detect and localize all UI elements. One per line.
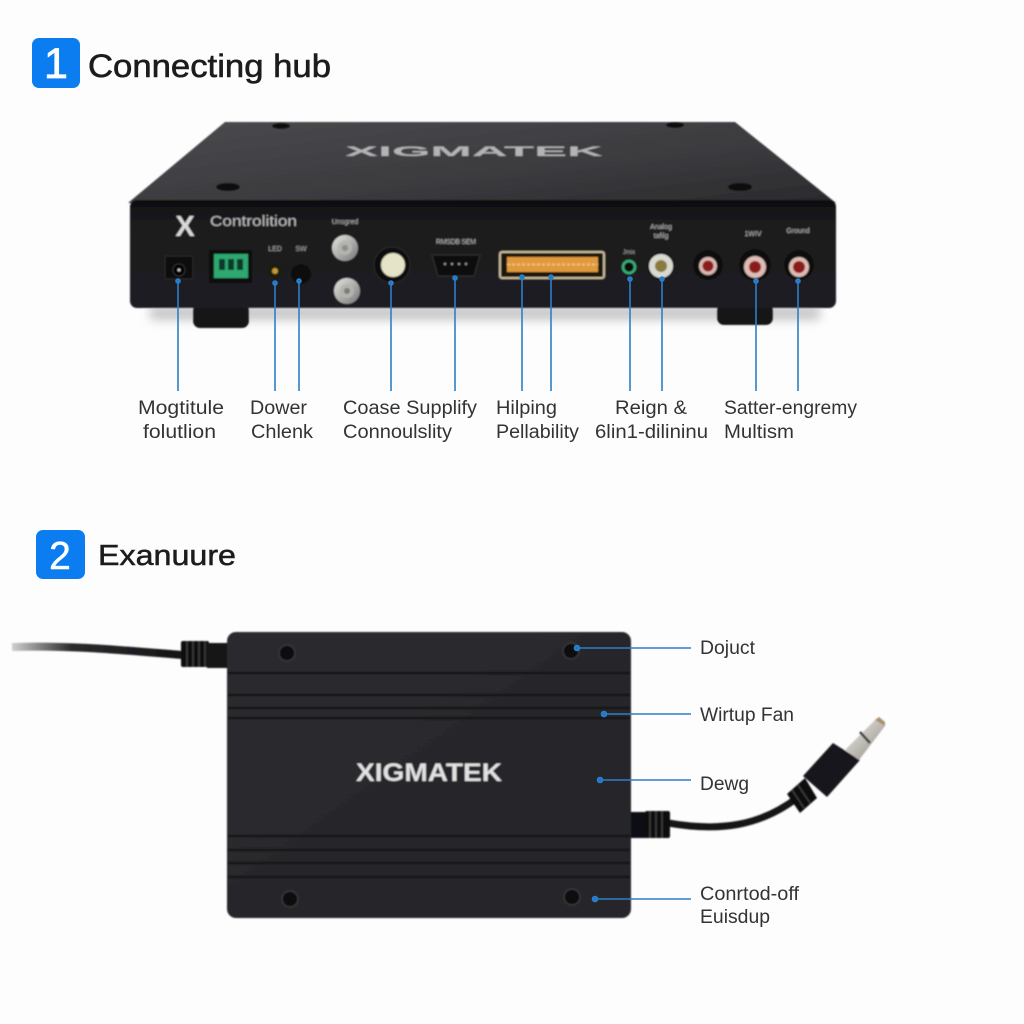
label: Satter-engremy Multism bbox=[724, 398, 857, 443]
LED and switch bbox=[268, 246, 311, 284]
white RCA jack bbox=[648, 224, 674, 279]
label: Hilping Pellability: Hilping bbox=[496, 398, 557, 419]
label: Wirtup Fan: Wirtup Fan bbox=[700, 705, 794, 726]
front logo and name bbox=[175, 211, 297, 243]
serial port: RMSDB SEM bbox=[436, 239, 476, 246]
power jack bbox=[165, 256, 193, 279]
label: Conrtod-off Euisdup: Conrtod-off bbox=[700, 884, 800, 905]
heading 1: Connecting hub bbox=[32, 38, 331, 88]
red RCA jacks: 1WIV bbox=[744, 231, 762, 238]
label: Hilping Pellability: Pellability bbox=[496, 422, 580, 443]
label: Hilping Pellability bbox=[496, 398, 580, 443]
label: Conrtod-off Euisdup: Euisdup bbox=[700, 907, 770, 928]
screws on top bbox=[216, 122, 752, 191]
label: Reign & 6lin1-dilininu bbox=[595, 398, 708, 443]
front logo and name: Controlition bbox=[210, 213, 297, 230]
white RCA jack: tafilg bbox=[654, 233, 668, 240]
label: Coase Supplify Connoulslity bbox=[343, 398, 478, 443]
green audio jack bbox=[623, 250, 635, 273]
label: Reign & 6lin1-dilininu: 6lin1-dilininu bbox=[595, 422, 708, 443]
green audio jack: Jmix bbox=[623, 250, 635, 256]
label: Coase Supplify Connoulslity: Connoulslity bbox=[343, 422, 453, 443]
heading 2: Exanuure: Exanuure bbox=[98, 540, 236, 572]
top face bbox=[128, 122, 836, 203]
label: Satter-engremy Multism: Multism bbox=[724, 422, 794, 443]
label: Mogtitule folution bbox=[138, 398, 224, 443]
cable: audio jack bbox=[628, 717, 885, 838]
heading 2: Exanuure: 2 bbox=[49, 535, 71, 578]
logo: XIGMATEK bbox=[356, 759, 502, 787]
ridges bbox=[228, 673, 630, 877]
red RCA jacks bbox=[693, 228, 814, 281]
orange pin connector bbox=[500, 252, 604, 278]
heading 1: Connecting hub: Connecting hub bbox=[88, 48, 331, 84]
serial port bbox=[432, 239, 480, 276]
label: Conrtod-off Euisdup bbox=[700, 884, 800, 928]
LED and switch: SW bbox=[295, 246, 307, 253]
callout leader lines, hub bbox=[176, 275, 800, 391]
hub callout labels bbox=[138, 398, 857, 443]
device feet bbox=[193, 304, 773, 328]
heading 2: Exanuure bbox=[36, 530, 236, 579]
label: Mogtitule folution: Mogtitule bbox=[138, 398, 224, 419]
label: Reign & 6lin1-dilininu: Reign & bbox=[615, 398, 687, 419]
top face logo: XIGMATEK bbox=[345, 143, 603, 159]
green terminal bbox=[209, 250, 252, 283]
label: Dower Chlenk: Chlenk bbox=[251, 422, 314, 443]
LED and switch: LED bbox=[268, 246, 282, 253]
label: Dojuct: Dojuct bbox=[700, 638, 756, 659]
label: Dower Chlenk bbox=[250, 398, 314, 443]
screws bbox=[279, 643, 580, 907]
round button bbox=[374, 247, 410, 283]
front face bbox=[130, 200, 836, 308]
device: second unit bbox=[227, 632, 631, 918]
BNC connectors: Unsgred bbox=[332, 219, 358, 226]
second unit callout labels bbox=[700, 638, 800, 928]
label: Satter-engremy Multism: Satter-engremy bbox=[724, 398, 857, 419]
label: Dower Chlenk: Dower bbox=[250, 398, 308, 419]
heading 1: Connecting hub: 1 bbox=[44, 40, 68, 88]
cable: left power cord bbox=[12, 641, 229, 668]
front logo and name: X bbox=[175, 211, 195, 243]
callout leader lines, second unit bbox=[574, 646, 691, 902]
label: Mogtitule folution: folutlion bbox=[143, 422, 216, 443]
label: Coase Supplify Connoulslity: Coase Supplify bbox=[343, 398, 478, 419]
white RCA jack: Analog bbox=[650, 224, 672, 231]
BNC connectors bbox=[332, 219, 360, 304]
label: Dewg: Dewg bbox=[700, 774, 749, 795]
device: connecting hub bbox=[128, 122, 836, 328]
red RCA jacks: Ground bbox=[786, 228, 810, 235]
